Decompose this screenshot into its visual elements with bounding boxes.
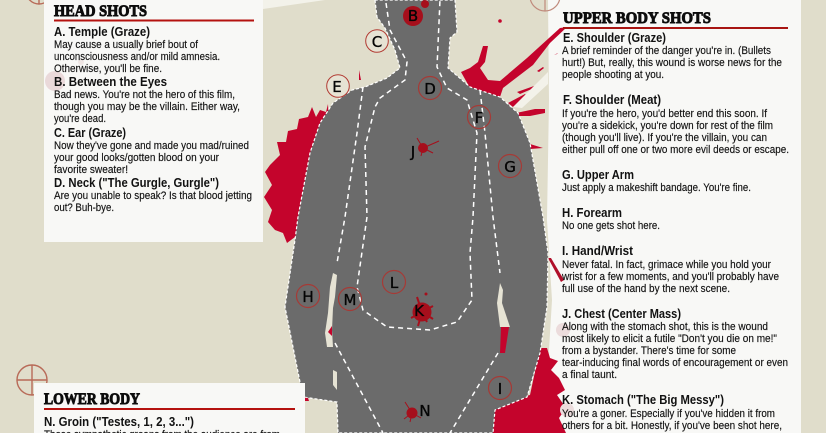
dashed inner outlines <box>335 0 500 433</box>
panel: upper body shots text: you're a sidekick, you're down for rest of the film <box>562 120 773 132</box>
marker M: M <box>344 291 356 309</box>
panel: upper body shots text: either pull off one or two more evil deeds or escape. <box>562 144 789 156</box>
blood splatter: left of body <box>264 104 330 243</box>
panel: head shots: A. Temple (Graze) <box>54 25 150 39</box>
panel: head shots: out? Buh-bye. <box>54 202 114 214</box>
panel: lower body: N. Groin ("Testes, 1, 2, 3...") <box>44 415 194 429</box>
gap between left arm and torso <box>325 273 337 347</box>
panel: head shots: favorite sweater! <box>54 164 128 176</box>
panel: upper body shots text: Just apply a makeshift bandage. You're fine. <box>562 182 751 194</box>
panel: lower body <box>34 383 305 433</box>
panel: upper body shots text: wrist for a few moments, and you'll probably have <box>561 271 779 283</box>
marker L <box>382 270 406 294</box>
marker J wound: J <box>410 143 415 161</box>
panel: upper body shots text: (though you'll live). If you're the villain, you can <box>562 132 767 144</box>
panel: upper body shots text: Along with the stomach shot, this is the wound <box>562 321 768 333</box>
marker E <box>327 75 349 97</box>
panel: head shots: Bad news. You're not the hero of this film, <box>54 89 235 101</box>
blood splatter: right shoulder <box>359 19 567 149</box>
body silhouette target <box>285 0 548 433</box>
panel: upper body shots text: people shooting at you. <box>562 69 664 81</box>
marker B wound: B <box>408 7 418 25</box>
panel: upper body shots text: I. Hand/Wrist <box>562 244 634 258</box>
panel: upper body background <box>547 0 801 433</box>
marker C <box>366 30 388 52</box>
panel: upper body shots text: J. Chest (Center Mass) <box>562 307 681 321</box>
crosshair: top right <box>530 0 560 11</box>
marker H <box>296 284 320 308</box>
marker K wound <box>411 292 433 326</box>
marker H: H <box>302 288 314 306</box>
panel: upper body shots text: No one gets shot here. <box>562 220 660 232</box>
panel: upper body shots text: most likely to elicit a futile "Don't you die on me!" <box>562 333 777 345</box>
marker D: D <box>424 80 436 98</box>
heading: upper body shots: UPPER BODY SHOTS <box>563 10 711 27</box>
marker J wound <box>410 138 439 161</box>
blood splatter: lower right <box>490 348 566 433</box>
panel: head shots: B. Between the Eyes <box>54 75 167 89</box>
panel: head shots: you're dead. <box>54 113 106 125</box>
panel: head shots: Now they've gone and made you mad/ruined <box>54 140 249 152</box>
panel: upper body shots text <box>556 10 789 432</box>
panel: upper body shots text: F. Shoulder (Meat) <box>563 93 661 107</box>
marker G: G <box>504 158 516 176</box>
heading: head shots: HEAD SHOTS <box>54 3 147 20</box>
panel: upper body shots text: K. Stomach ("The Big Messy") <box>562 393 724 407</box>
panel: upper body shots text: A brief reminder of the danger you're in. (Bullets <box>562 45 771 57</box>
marker N wound <box>404 402 431 422</box>
panel: upper body shots text: tear-inducing final words of encouragement or even <box>562 357 788 369</box>
marker M <box>338 288 362 310</box>
marker D <box>418 76 442 100</box>
panel: head shots: Otherwise, you'll be fine. <box>54 63 162 75</box>
panel: upper body shots text: Never fatal. In fact, grimace while you hold your <box>562 259 771 271</box>
light streak behind shoulder <box>513 72 548 108</box>
panel: head shots: your good looks/gotten blood on your <box>54 152 219 164</box>
gap between right arm and torso <box>497 283 510 327</box>
marker G <box>498 154 522 178</box>
panel: head shots: Are you unable to speak? Is that blood jetting <box>54 190 252 202</box>
panel: upper body shots text: hurt!) But, really, this wound is worse news for the <box>562 57 782 69</box>
panel: upper body shots text: If you're the hero, you'd better end this soon. If <box>562 108 768 120</box>
marker K wound: K <box>414 302 425 320</box>
crosshair: top left <box>26 0 52 4</box>
marker C: C <box>372 33 382 51</box>
marker E: E <box>332 78 342 96</box>
marker F: F <box>475 109 483 127</box>
panel: upper body shots text: a final taunt. <box>562 369 617 381</box>
marker I: I <box>498 380 502 398</box>
marker F <box>468 106 490 128</box>
marker N wound: N <box>419 402 431 420</box>
crosshair: lower left <box>17 365 47 395</box>
panel: upper body shots text: G. Upper Arm <box>562 168 634 182</box>
panel: head shots: May cause a usually brief bout of <box>54 39 199 51</box>
panel: upper body shots text: You're a goner. Especially if you've hidden it from <box>562 408 775 420</box>
panel: upper body shots text: full use of the hand by the next scene. <box>562 283 730 295</box>
heading: lower body: LOWER BODY <box>44 391 140 408</box>
panel: head shots: though you may be the villain. Either way, <box>54 101 240 113</box>
panel: upper body shots text: E. Shoulder (Graze) <box>563 31 666 45</box>
blood streak: hand edge <box>548 258 564 282</box>
marker I <box>488 376 512 400</box>
panel: head shots: D. Neck ("The Gurgle, Gurgle") <box>54 176 219 190</box>
panel: head shots <box>44 0 263 242</box>
panel: upper body shots text: others for a bit. Honestly, if you've been shot here, <box>562 420 782 432</box>
panel: upper body shots text: from a bystander. There's time for some <box>562 345 736 357</box>
marker L: L <box>390 274 399 292</box>
panel: upper body shots text: H. Forearm <box>562 206 622 220</box>
panel: head shots: C. Ear (Graze) <box>54 126 126 140</box>
marker B wound <box>403 0 429 26</box>
panel: head shots: unconsciousness and/or mild amnesia. <box>54 51 220 63</box>
